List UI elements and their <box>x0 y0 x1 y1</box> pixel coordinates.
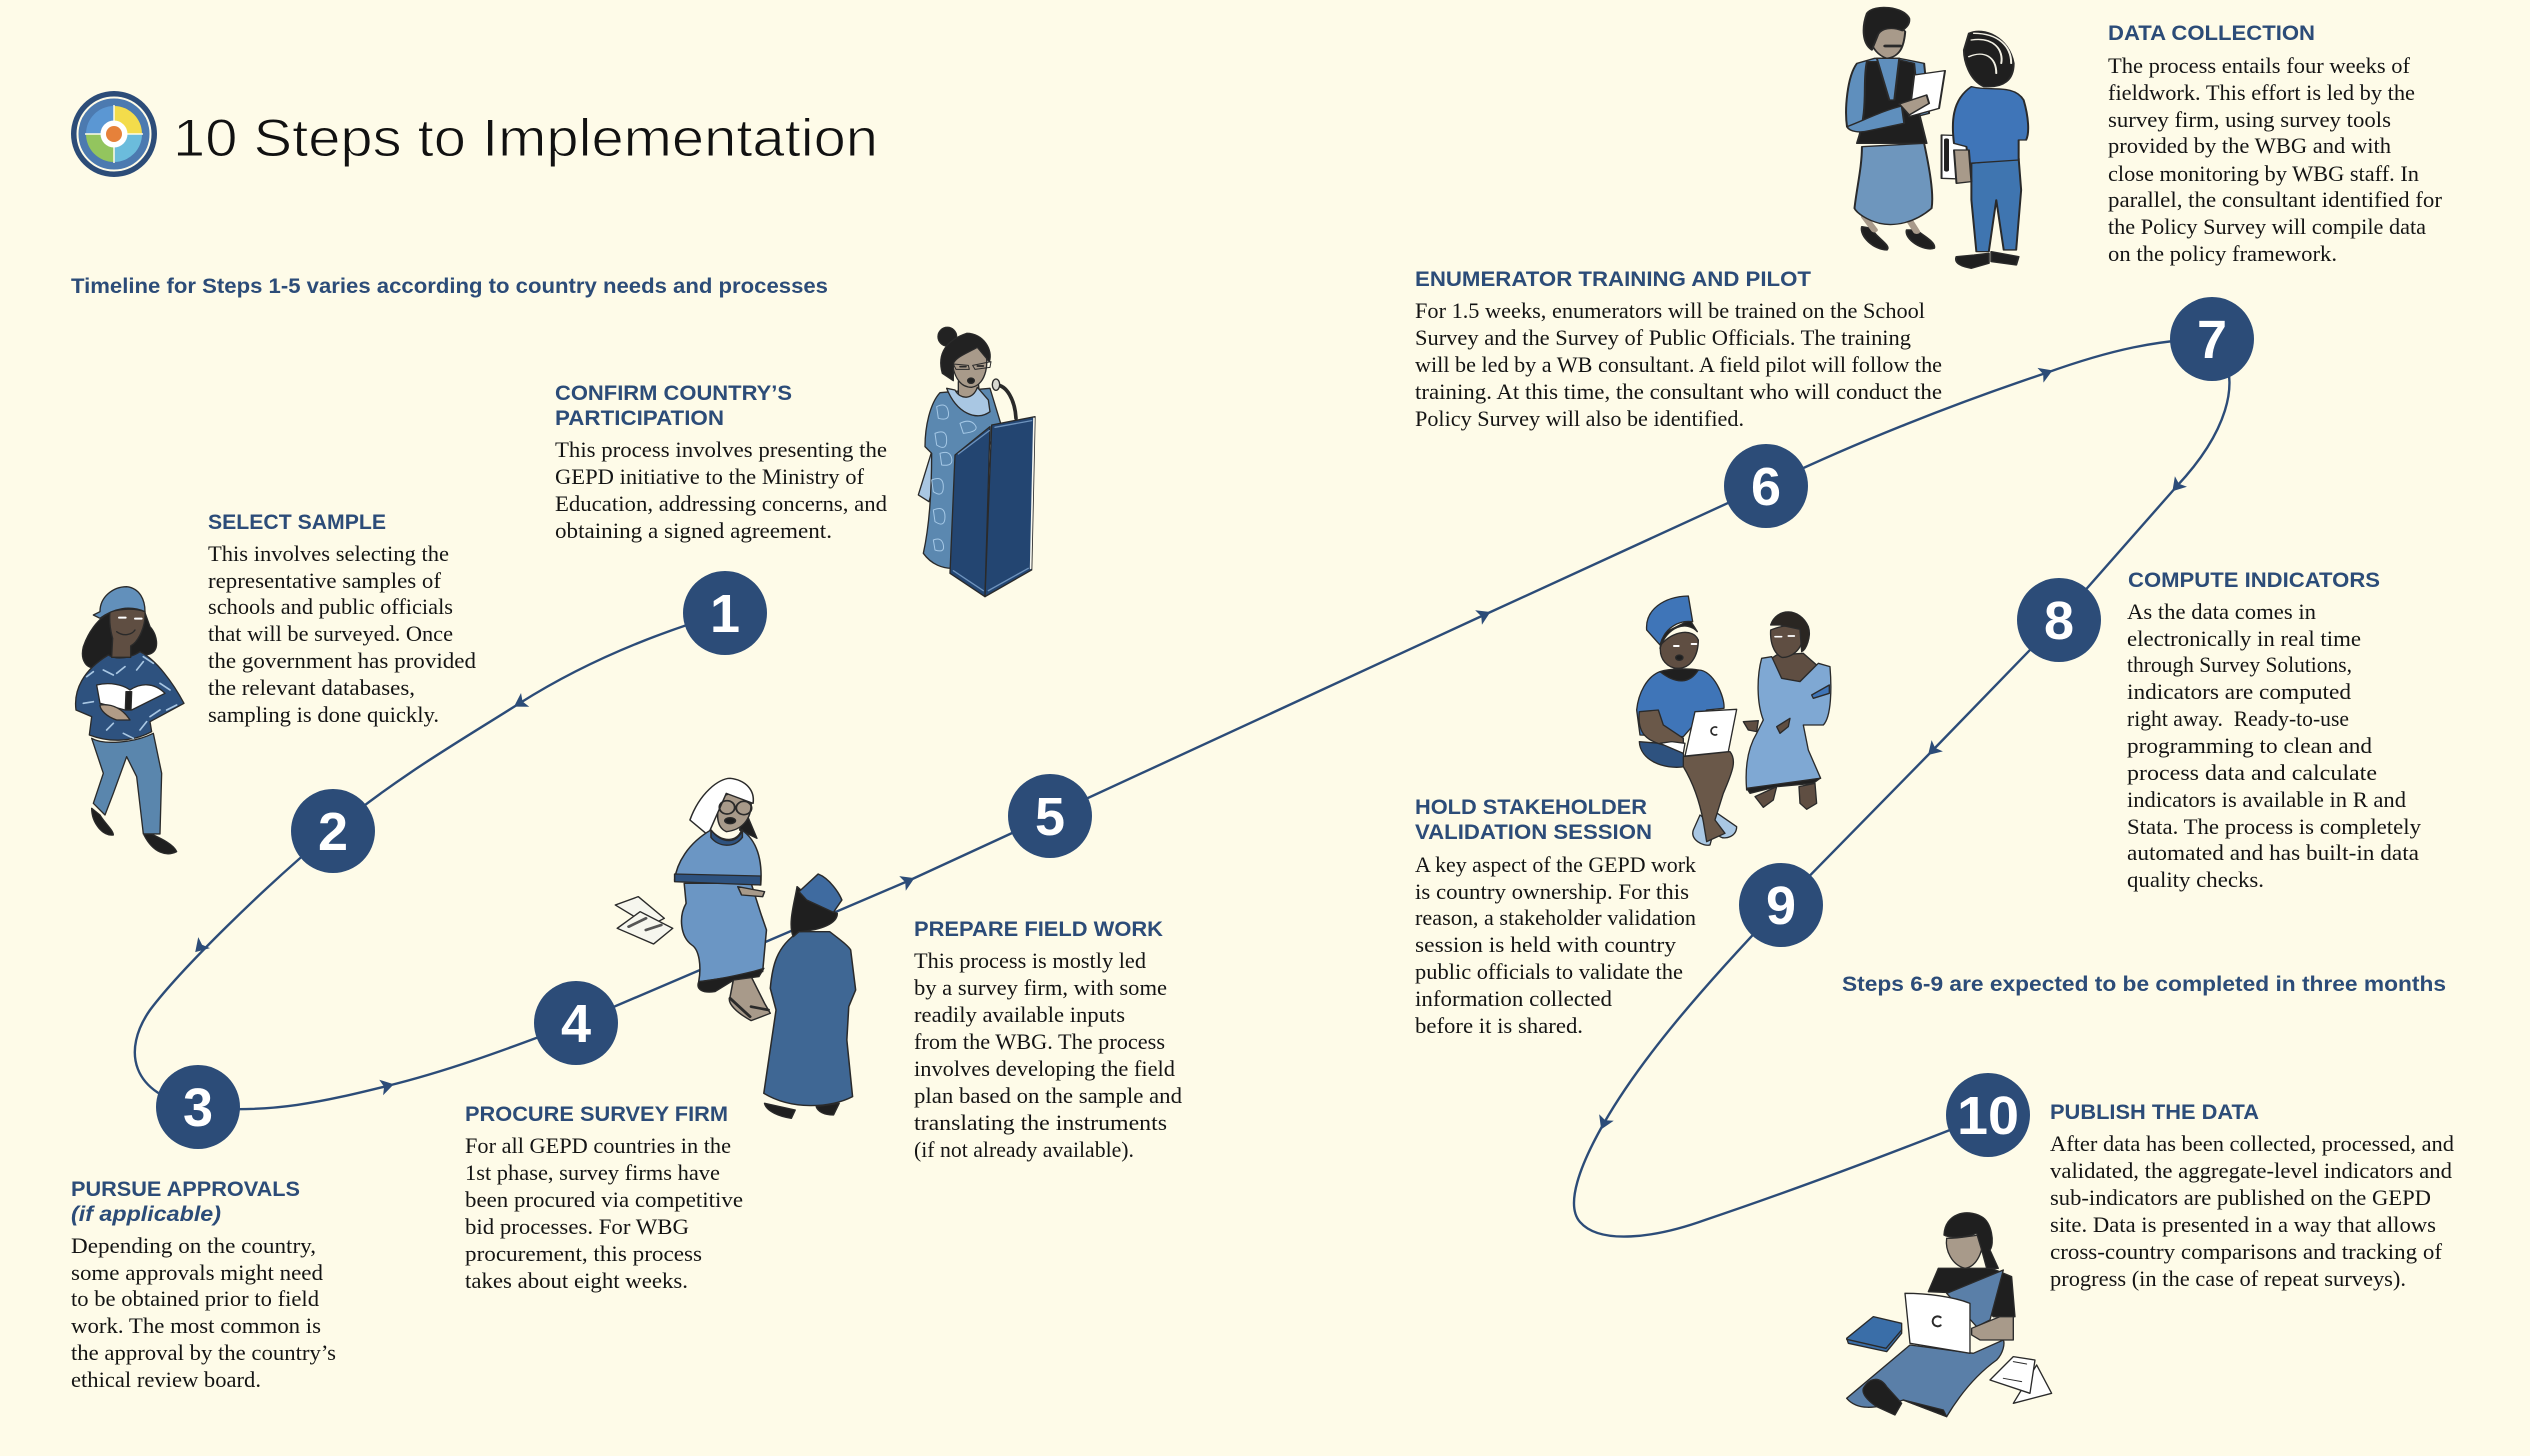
step marker 6 <box>1724 444 1808 528</box>
body text: schools and public officials <box>208 594 453 619</box>
body text: The process entails four weeks of <box>2108 53 2411 78</box>
body text: Stata. The process is completely <box>2127 814 2421 839</box>
body text: procurement, this process <box>465 1241 702 1266</box>
step marker 9: 9 <box>1766 876 1796 936</box>
body text: Education, addressing concerns, and <box>555 491 887 516</box>
illustration: seated woman and standing man <box>615 778 856 1118</box>
heading: VALIDATION SESSION <box>1415 821 1652 844</box>
body text: is country ownership. For this <box>1415 879 1689 904</box>
heading: PROCURE SURVEY FIRM <box>465 1103 728 1126</box>
step marker 2: 2 <box>318 802 348 862</box>
body text: programming to clean and <box>2127 733 2372 758</box>
step marker 8 <box>2017 578 2101 662</box>
body text <box>465 1133 743 1293</box>
step marker 7 <box>2170 297 2254 381</box>
body text: plan based on the sample and <box>914 1083 1182 1108</box>
body text: parallel, the consultant identified for <box>2108 187 2443 212</box>
body text: through Survey Solutions, <box>2127 652 2352 677</box>
step marker 4 <box>534 981 618 1065</box>
title: 10 Steps to Implementation <box>173 109 878 168</box>
body text: the Policy Survey will compile data <box>2108 214 2426 239</box>
body text: provided by the WBG and with <box>2108 133 2391 158</box>
body text <box>208 541 476 727</box>
illustration: woman walking with book <box>76 587 184 854</box>
body text: This involves selecting the <box>208 541 449 566</box>
body text: Depending on the country, <box>71 1233 316 1258</box>
body text: indicators is available in R and <box>2127 787 2406 812</box>
body text: before it is shared. <box>1415 1013 1583 1038</box>
body text: takes about eight weeks. <box>465 1268 688 1293</box>
body text: involves developing the field <box>914 1056 1175 1081</box>
body text: on the policy framework. <box>2108 241 2337 266</box>
body text <box>71 1233 336 1392</box>
heading: (if applicable) <box>71 1203 221 1226</box>
body text: This process is mostly led <box>914 948 1146 973</box>
illustration: two people talking, data collection <box>1846 7 2028 268</box>
body text: by a survey firm, with some <box>914 975 1167 1000</box>
step marker 8: 8 <box>2044 591 2074 651</box>
body text: fieldwork. This effort is led by the <box>2108 80 2415 105</box>
body text: that will be surveyed. Once <box>208 621 453 646</box>
panel: step 10 publish the data <box>2050 1101 2454 1291</box>
body text: For 1.5 weeks, enumerators will be trained on the School <box>1415 298 1925 323</box>
panel: step 7 data collection <box>2108 22 2443 266</box>
panel: step 4 procure survey firm <box>465 1103 743 1293</box>
body text <box>914 948 1182 1162</box>
body text: public officials to validate the <box>1415 959 1683 984</box>
body text <box>1415 852 1696 1038</box>
body text: from the WBG. The process <box>914 1029 1165 1054</box>
body text <box>2108 53 2443 266</box>
body text: site. Data is presented in a way that allows <box>2050 1212 2436 1237</box>
step marker 10: 10 <box>1957 1086 2019 1146</box>
heading: DATA COLLECTION <box>2108 22 2315 45</box>
body text: representative samples of <box>208 568 442 593</box>
body text <box>2050 1131 2454 1291</box>
body text: Survey and the Survey of Public Officials. The training <box>1415 325 1911 350</box>
body text: quality checks. <box>2127 867 2264 892</box>
body text: to be obtained prior to field <box>71 1286 319 1311</box>
step marker 3: 3 <box>183 1078 213 1138</box>
heading: PUBLISH THE DATA <box>2050 1101 2259 1124</box>
body text: sub-indicators are published on the GEPD <box>2050 1185 2431 1210</box>
heading <box>555 382 792 430</box>
heading: CONFIRM COUNTRY’S <box>555 382 792 405</box>
panel: step 5 prepare field work <box>914 918 1182 1162</box>
step marker 5: 5 <box>1035 787 1065 847</box>
body text: the relevant databases, <box>208 675 415 700</box>
body text: validated, the aggregate-level indicators and <box>2050 1158 2452 1183</box>
body text: training. At this time, the consultant who will conduct the <box>1415 379 1942 404</box>
body text <box>1415 298 1942 431</box>
logo <box>71 91 157 177</box>
step marker 9 <box>1739 863 1823 947</box>
panel: step 6 enumerator training and pilot <box>1415 268 1942 431</box>
body text: obtaining a signed agreement. <box>555 518 832 543</box>
timeline note: steps 1-5: Timeline for Steps 1-5 varies according to country needs and processes <box>71 275 828 298</box>
body text: work. The most common is <box>71 1313 321 1338</box>
body text: reason, a stakeholder validation <box>1415 905 1696 930</box>
body text: will be led by a WB consultant. A field pilot will follow the <box>1415 352 1942 377</box>
body text: A key aspect of the GEPD work <box>1415 852 1696 877</box>
body text: As the data comes in <box>2127 599 2316 624</box>
illustration: two seated women with laptop <box>1637 596 1831 845</box>
heading <box>1415 796 1652 844</box>
heading: PARTICIPATION <box>555 407 724 430</box>
body text: the approval by the country’s <box>71 1340 336 1365</box>
body text: automated and has built-in data <box>2127 840 2419 865</box>
body text <box>555 437 887 543</box>
step marker 6: 6 <box>1751 457 1781 517</box>
heading: ENUMERATOR TRAINING AND PILOT <box>1415 268 1811 291</box>
body text: right away. Ready-to-use <box>2127 706 2349 731</box>
illustration: woman at podium <box>918 327 1035 597</box>
body text: process data and calculate <box>2127 760 2377 785</box>
body text: some approvals might need <box>71 1260 323 1285</box>
body text <box>2127 599 2421 892</box>
panel: step 1 confirm participation <box>555 382 887 543</box>
body text: survey firm, using survey tools <box>2108 107 2391 132</box>
body text: translating the instruments <box>914 1110 1167 1135</box>
body text: electronically in real time <box>2127 626 2361 651</box>
body text: been procured via competitive <box>465 1187 743 1212</box>
heading: SELECT SAMPLE <box>208 511 386 534</box>
heading: PURSUE APPROVALS <box>71 1178 300 1201</box>
heading: COMPUTE INDICATORS <box>2128 569 2380 592</box>
step marker 7: 7 <box>2197 310 2227 370</box>
body text: Policy Survey will also be identified. <box>1415 406 1744 431</box>
step marker 1 <box>683 571 767 655</box>
body text: sampling is done quickly. <box>208 702 439 727</box>
step marker 4: 4 <box>561 994 591 1054</box>
body text: This process involves presenting the <box>555 437 887 462</box>
body text: For all GEPD countries in the <box>465 1133 731 1158</box>
step marker 2 <box>291 789 375 873</box>
panel: step 3 pursue approvals <box>71 1178 336 1392</box>
step marker 10 <box>1946 1073 2030 1157</box>
body text: After data has been collected, processed, and <box>2050 1131 2454 1156</box>
heading <box>71 1178 300 1226</box>
heading: PREPARE FIELD WORK <box>914 918 1163 941</box>
spiral path connecting the steps <box>135 339 2229 1237</box>
panel: step 8 compute indicators <box>2127 569 2421 892</box>
heading: HOLD STAKEHOLDER <box>1415 796 1647 819</box>
body text: cross-country comparisons and tracking of <box>2050 1239 2443 1264</box>
step marker 1: 1 <box>710 584 740 644</box>
body text: information collected <box>1415 986 1612 1011</box>
panel: step 9 hold stakeholder validation session <box>1415 796 1696 1038</box>
timeline note: steps 6-9: Steps 6-9 are expected to be completed in three months <box>1842 973 2446 996</box>
body text: indicators are computed <box>2127 679 2351 704</box>
body text: 1st phase, survey firms have <box>465 1160 720 1185</box>
step marker 3 <box>156 1065 240 1149</box>
step marker 5 <box>1008 774 1092 858</box>
illustration: woman with laptop on the floor <box>1847 1213 2052 1417</box>
body text: session is held with country <box>1415 932 1676 957</box>
path arrowheads <box>189 363 2187 1133</box>
body text: GEPD initiative to the Ministry of <box>555 464 865 489</box>
body text: the government has provided <box>208 648 476 673</box>
body text: readily available inputs <box>914 1002 1125 1027</box>
panel: step 2 select sample <box>208 511 476 727</box>
body text: ethical review board. <box>71 1367 261 1392</box>
body text: bid processes. For WBG <box>465 1214 689 1239</box>
body text: progress (in the case of repeat surveys). <box>2050 1266 2406 1291</box>
body text: (if not already available). <box>914 1137 1134 1162</box>
body text: close monitoring by WBG staff. In <box>2108 161 2419 186</box>
